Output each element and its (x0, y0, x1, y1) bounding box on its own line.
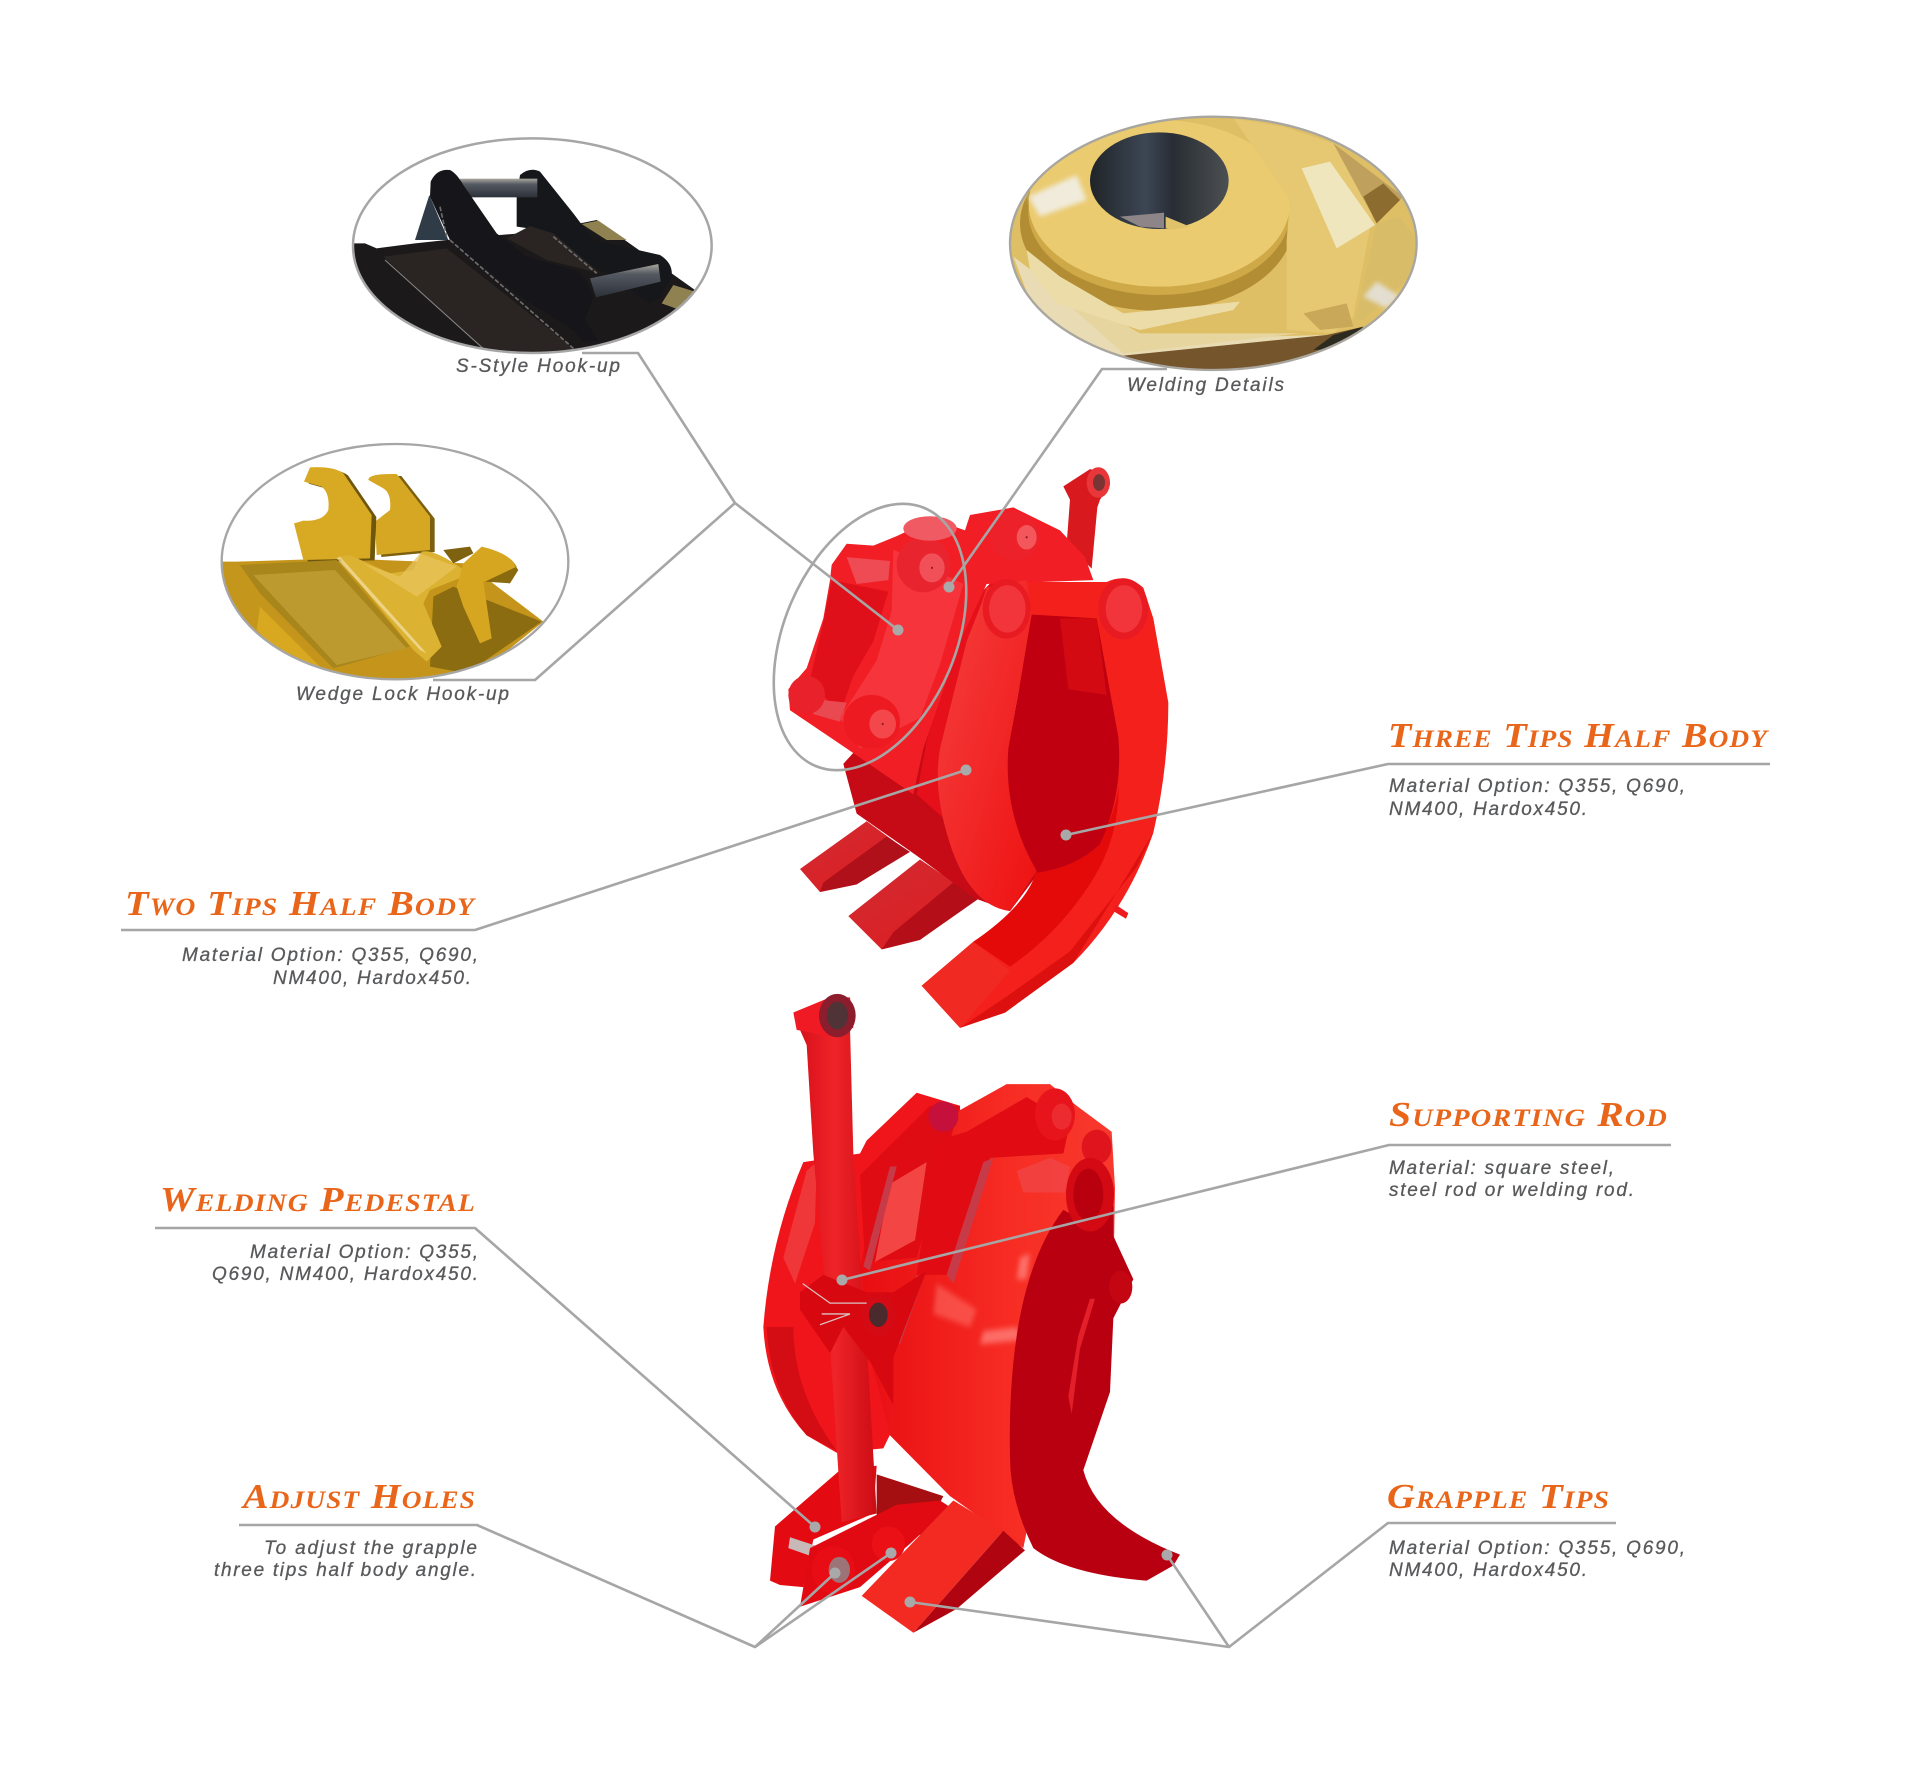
label: Two Tips Half Body: NM400, Hardox450. (273, 968, 471, 989)
label: Adjust Holes: Adjust Holes (241, 1477, 476, 1516)
caption: S-Style Hook-up: S-Style Hook-up (456, 356, 620, 377)
caption: Wedge Lock Hook-up: Wedge Lock Hook-up (296, 684, 509, 705)
leader: welding details (944, 369, 1167, 592)
label: Welding Pedestal (160, 1180, 478, 1285)
label: Grapple Tips (1387, 1477, 1685, 1581)
rear half body (763, 1093, 963, 1453)
label: Three Tips Half Body: NM400, Hardox450. (1389, 799, 1587, 820)
hook plates (788, 507, 1093, 794)
label: Supporting Rod: Supporting Rod (1389, 1095, 1668, 1134)
label: Adjust Holes: To adjust the grapple (264, 1538, 477, 1559)
photo: welding details (1000, 110, 1427, 377)
tips left (800, 821, 903, 892)
oval outline around hook-up on top grapple (736, 475, 1004, 799)
label: Adjust Holes (214, 1477, 477, 1581)
leader: three tips half body (1060, 764, 1770, 840)
three tips half body (922, 578, 1168, 1028)
photo: wedge lock hook-up (222, 444, 568, 683)
side plate (1010, 1206, 1180, 1581)
grapple tip (862, 1500, 1003, 1633)
infographic canvas (121, 116, 1770, 1648)
welding oval border (1010, 117, 1417, 370)
label: Supporting Rod: Material: square steel, (1389, 1158, 1614, 1179)
label: Supporting Rod (1389, 1095, 1668, 1201)
inner cavity (1007, 615, 1119, 873)
image: bottom grapple (supporting rod, pedestal, tips) (763, 994, 1180, 1633)
label: Three Tips Half Body: Three Tips Half Body (1388, 716, 1770, 755)
wedge oval border (222, 444, 568, 679)
leader: adjust holes (239, 1525, 896, 1647)
label: Grapple Tips: Grapple Tips (1387, 1477, 1610, 1516)
caption: Welding Details: Welding Details (1127, 375, 1284, 396)
label: Welding Pedestal: Welding Pedestal (160, 1180, 476, 1219)
label: Two Tips Half Body (125, 884, 478, 989)
label: Grapple Tips: NM400, Hardox450. (1389, 1560, 1587, 1581)
leader: welding pedestal (155, 1228, 820, 1532)
support arm (1063, 469, 1110, 569)
front drum (860, 1084, 1115, 1548)
image: top grapple (three tips half body and two tips half body) (788, 467, 1168, 1028)
leader: S-Style and wedge lock hook-up (433, 353, 904, 680)
supporting rod (800, 1028, 877, 1522)
label: Adjust Holes: three tips half body angle. (214, 1560, 476, 1581)
rod lug (800, 1271, 927, 1405)
label: Three Tips Half Body (1388, 716, 1770, 820)
leader: supporting rod (836, 1145, 1671, 1286)
two tips half body (938, 580, 1037, 911)
label: Two Tips Half Body: Material Option: Q355, Q690, (182, 945, 478, 966)
photo: S-Style hook-up (353, 138, 712, 367)
welding pedestal and lower frame (877, 1474, 943, 1535)
S-Style oval border (353, 138, 712, 353)
label: Welding Pedestal: Material Option: Q355, (250, 1242, 478, 1263)
label: Two Tips Half Body: Two Tips Half Body (125, 884, 477, 923)
label: Three Tips Half Body: Material Option: Q355, Q690, (1389, 776, 1685, 797)
rod head (793, 997, 853, 1036)
pivot rings (983, 579, 1031, 639)
label: Supporting Rod: steel rod or welding rod. (1389, 1180, 1634, 1201)
rear drum (843, 641, 1040, 911)
leader: grapple tips (904, 1523, 1616, 1647)
leader: two tips half body (121, 764, 972, 930)
label: Grapple Tips: Material Option: Q355, Q690, (1389, 1538, 1685, 1559)
label: Welding Pedestal: Q690, NM400, Hardox450. (212, 1264, 478, 1285)
